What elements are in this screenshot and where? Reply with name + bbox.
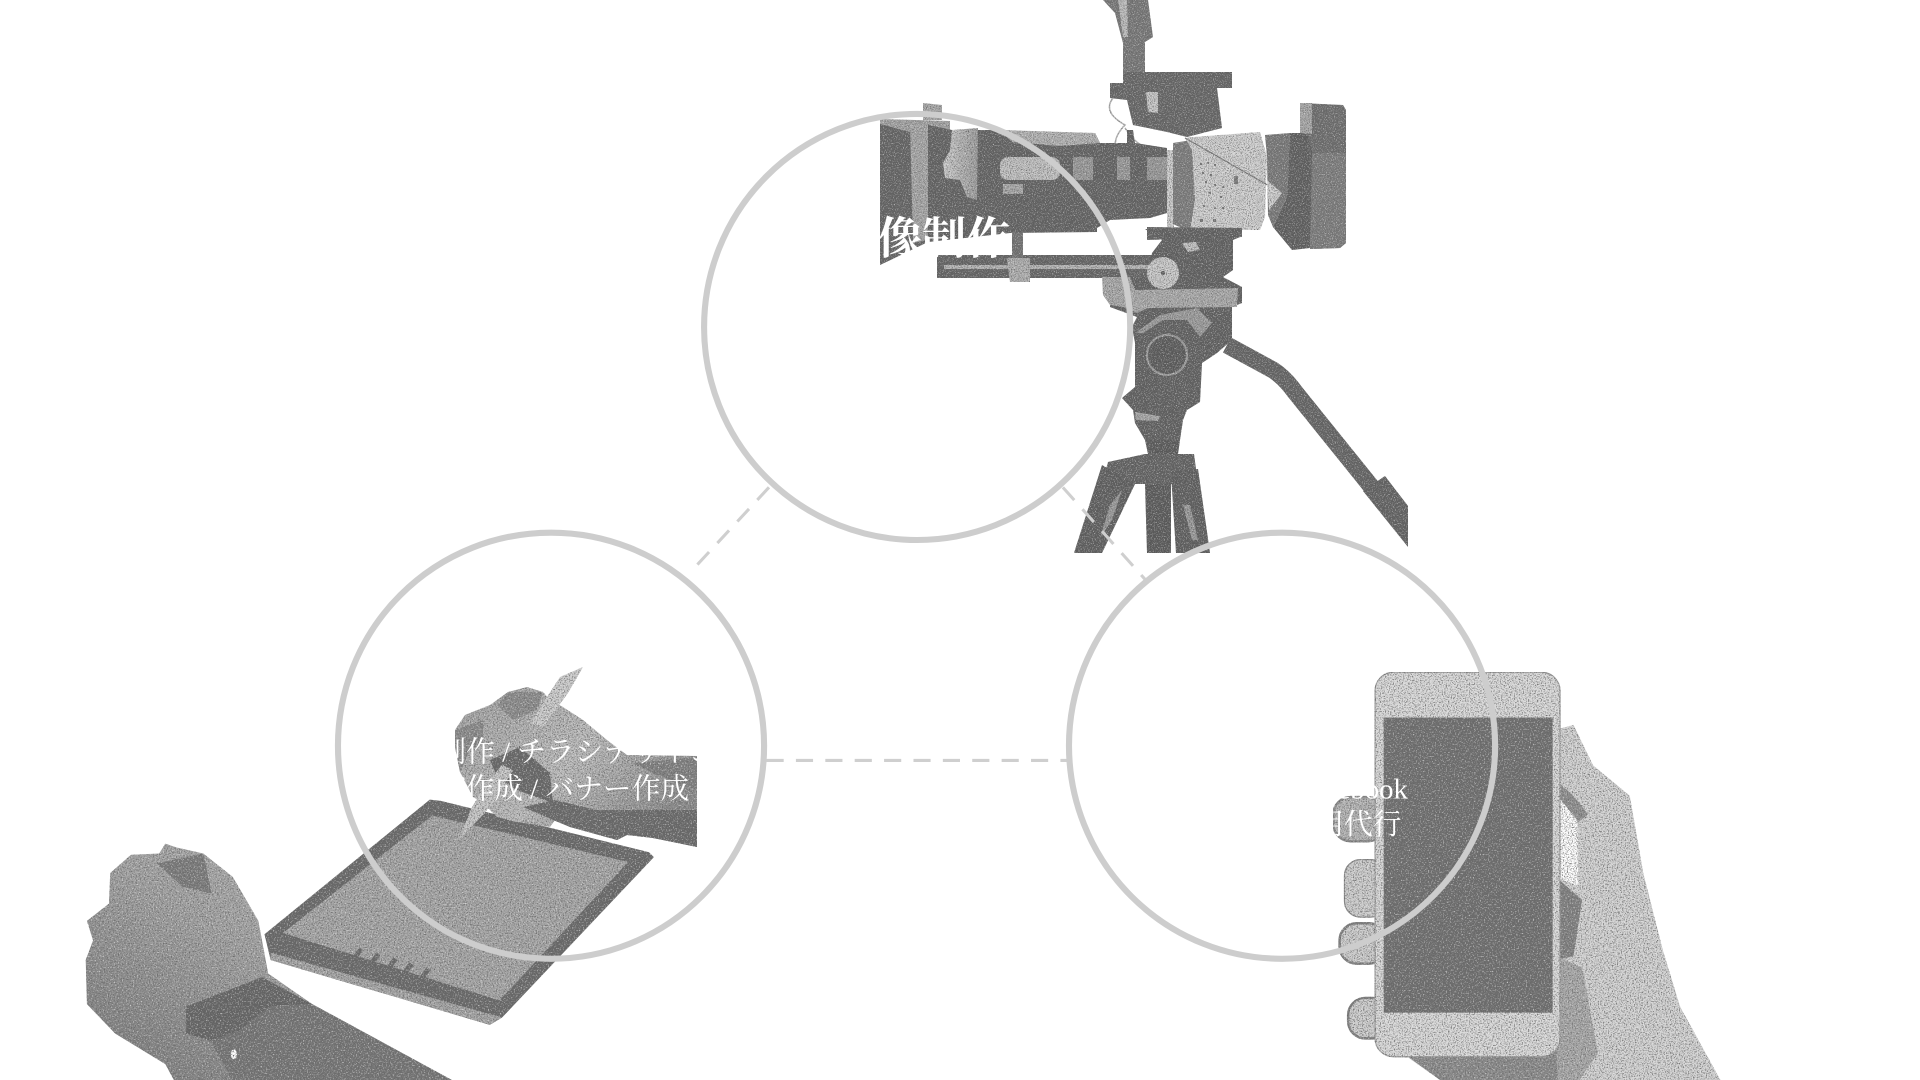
circle ring	[338, 533, 764, 959]
lens cylinder 1	[943, 128, 978, 200]
lens labels	[1003, 184, 1023, 194]
rail	[937, 255, 1162, 278]
head patch	[1182, 242, 1200, 252]
right leg highlight	[1183, 505, 1198, 540]
watch band	[186, 977, 312, 1041]
side knob	[1147, 257, 1179, 289]
left leg highlight	[1100, 490, 1122, 538]
lens hood	[880, 123, 928, 265]
head knob	[1147, 335, 1187, 375]
pan handle	[1227, 345, 1374, 490]
rail highlight	[944, 265, 1154, 269]
description: design production: Web制作 / チラシデザイン	[385, 737, 717, 769]
circle: design production	[338, 533, 764, 959]
rear plate	[1273, 133, 1313, 250]
drawing hand	[455, 687, 697, 847]
finger shadow	[157, 853, 212, 894]
wrist shadow	[523, 800, 697, 847]
description: SNS operation: Instagram / Facebook	[1159, 773, 1408, 805]
right leg	[1171, 469, 1210, 553]
rear mesh	[1265, 133, 1290, 227]
left leg	[1074, 465, 1135, 553]
battery highlight	[1300, 103, 1312, 134]
rail clamp	[1007, 258, 1030, 282]
heading: design production: デザイン制作	[420, 632, 682, 681]
arm highlight	[1118, 0, 1128, 37]
phone screen	[1384, 718, 1553, 1013]
finger shadow	[490, 747, 553, 803]
top monitor box	[1110, 72, 1232, 137]
connector: left circle to right circle	[767, 759, 1068, 762]
head arc	[1135, 308, 1212, 337]
finger 4	[1348, 998, 1390, 1038]
sleeve	[211, 1004, 452, 1080]
lens cylinder 2	[1000, 157, 1060, 180]
tablet tabs	[355, 949, 429, 977]
circle ring	[1069, 533, 1495, 959]
camera body	[1185, 132, 1267, 230]
battery lower panel	[1310, 153, 1346, 249]
palm shadow	[1408, 1029, 1582, 1080]
palm shadow	[455, 720, 483, 772]
connector: top circle to left circle	[692, 487, 769, 571]
neck band	[1135, 412, 1160, 421]
monitor highlight	[1146, 92, 1158, 113]
description: SNS operation: アカウント運用代行	[1143, 809, 1402, 841]
pen upper	[530, 667, 583, 727]
rear triangle highlight	[1267, 180, 1282, 210]
battery	[1300, 103, 1346, 249]
photo: left hand, tablet and drawing hand	[86, 667, 697, 1080]
hood tab	[923, 103, 942, 120]
resting fist	[86, 844, 452, 1080]
knuckle shadow	[497, 692, 543, 720]
spider	[1102, 454, 1198, 484]
lens body dark	[928, 125, 1167, 242]
centre leg	[1145, 484, 1171, 553]
heading: SNS operation: SNS運用	[1198, 632, 1367, 681]
thumb shadow	[1559, 784, 1588, 823]
phone body	[1375, 672, 1560, 1057]
mount light strip	[1167, 150, 1174, 227]
thumb gap	[1559, 797, 1578, 887]
neck lower	[1145, 440, 1180, 454]
lens rings	[1073, 157, 1167, 180]
lens top band	[1000, 130, 1100, 146]
body wire	[1185, 138, 1280, 192]
tablet frame	[264, 800, 654, 1025]
watch highlight	[231, 1049, 237, 1059]
quick release plate	[1102, 277, 1238, 313]
pan grip	[1363, 476, 1408, 547]
finger 1	[1333, 797, 1385, 841]
wrist upper shadow	[633, 757, 697, 790]
tablet edge	[271, 953, 502, 1025]
body vents	[1200, 162, 1238, 222]
heading: video production: 映像制作	[834, 214, 1010, 263]
pen lower	[459, 765, 513, 839]
cable loops	[1109, 98, 1150, 155]
palm and forearm	[1407, 725, 1720, 1080]
hood top band	[880, 119, 950, 132]
tablet screen	[283, 816, 628, 1000]
wrist shadow	[1553, 955, 1598, 1080]
circle ring	[704, 114, 1130, 540]
camera top arm	[1103, 0, 1153, 72]
photo: hand holding smartphone	[1333, 672, 1720, 1080]
fluid head	[1110, 229, 1242, 440]
finger shadow	[1553, 880, 1582, 960]
photo: cinema camera on tripod	[880, 0, 1408, 553]
finger 3	[1340, 923, 1386, 964]
description: design production: ロゴ作成 / バナー作成	[408, 773, 689, 805]
mount mesh	[1173, 140, 1195, 232]
hood strap	[910, 124, 928, 243]
clamp post	[1012, 232, 1023, 258]
circle: video production	[704, 114, 1130, 540]
connector: top circle to right circle	[1063, 487, 1145, 579]
under-body plate	[1147, 227, 1242, 240]
circle: SNS operation	[1069, 533, 1495, 959]
finger 2	[1344, 860, 1386, 917]
